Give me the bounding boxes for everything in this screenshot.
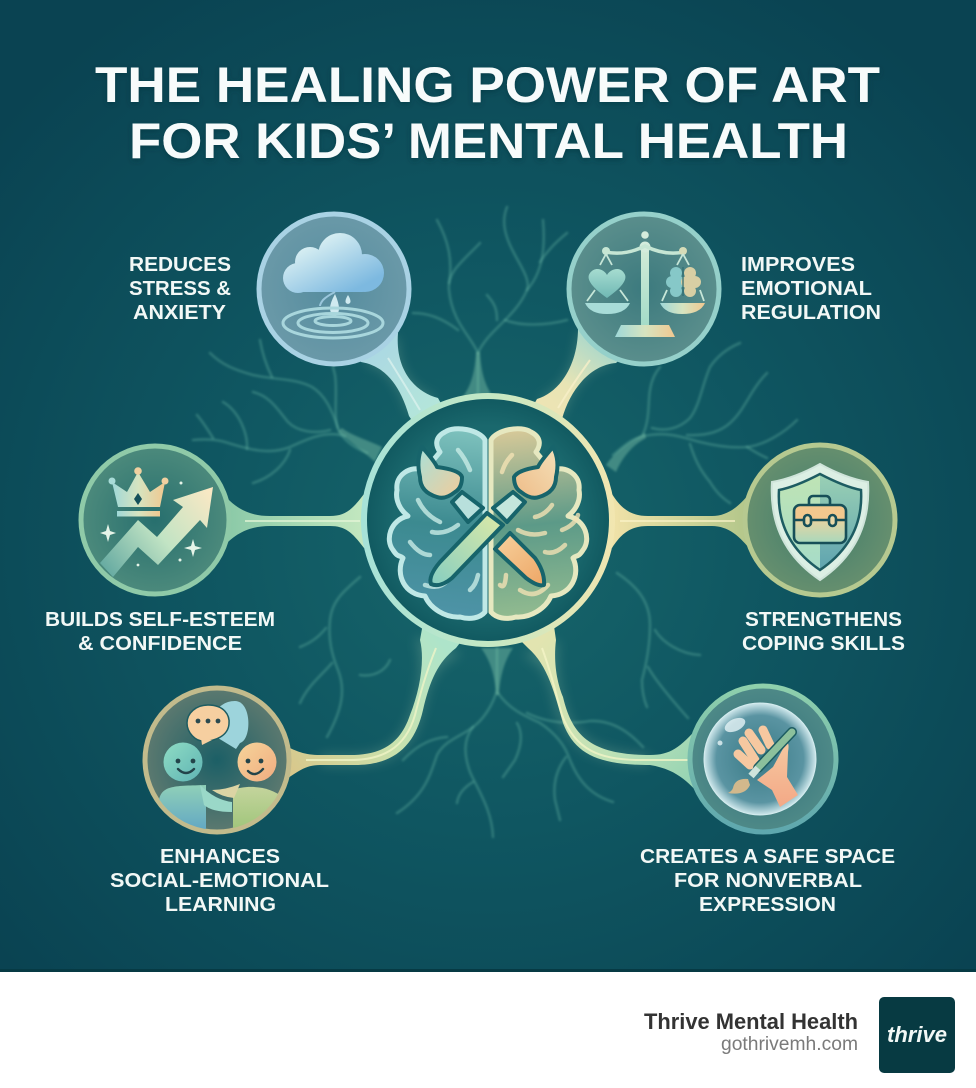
title: THE HEALING POWER OF ART	[95, 57, 880, 113]
label: strengthens coping skills: STRENGTHENS	[745, 608, 902, 631]
connector: safe space to centre	[510, 612, 705, 800]
central hub: brain and crossed paintbrushes	[364, 396, 612, 644]
label: strengthens coping skills: COPING SKILLS	[742, 632, 905, 655]
icon: briefcase	[794, 496, 846, 543]
panel: reduces stress and anxiety	[259, 214, 409, 364]
connector: stress to centre	[352, 325, 450, 440]
icon: two smiling friends	[159, 742, 278, 829]
icon: cloud with ripples	[283, 233, 384, 338]
connector glow	[320, 330, 650, 765]
connector: coping to centre	[596, 490, 752, 552]
label: reduces stress and anxiety: STRESS &	[129, 277, 231, 300]
logo	[879, 997, 955, 1073]
panel: strengthens coping skills	[745, 445, 895, 595]
label: builds self-esteem and confidence: & CONFIDENCE	[78, 632, 242, 655]
central ring	[364, 396, 612, 644]
label: enhances social-emotional learning: ENHANCES	[160, 845, 280, 868]
brand name: Thrive Mental Health	[644, 1009, 858, 1034]
label: enhances social-emotional learning: LEARNING	[165, 893, 276, 916]
icon: glass bubble	[704, 703, 816, 815]
label: reduces stress and anxiety: ANXIETY	[133, 301, 226, 324]
panel: builds self-esteem and confidence	[81, 446, 229, 594]
connector: regulation to centre	[525, 320, 630, 440]
label: builds self-esteem and confidence	[45, 608, 275, 655]
label: improves emotional regulation	[741, 253, 881, 324]
label: improves emotional regulation: EMOTIONAL	[741, 277, 872, 300]
icon: brain	[389, 429, 587, 618]
icon: shield with briefcase	[772, 464, 868, 580]
icon: left paintbrush	[418, 447, 544, 585]
label: builds self-esteem and confidence: BUILDS SELF-ESTEEM	[45, 608, 275, 631]
icon: rising arrow	[100, 487, 213, 577]
connector: confidence to centre	[220, 490, 380, 550]
label: improves emotional regulation: IMPROVES	[741, 253, 855, 276]
footer band	[0, 969, 976, 1088]
panel: enhances social-emotional learning	[145, 688, 290, 834]
label: reduces stress and anxiety: REDUCES	[129, 253, 231, 276]
label: enhances social-emotional learning: SOCIAL-EMOTIONAL	[110, 869, 329, 892]
connector: social-emotional to centre	[278, 612, 470, 785]
panel: improves emotional regulation	[569, 214, 719, 364]
icon: crown	[108, 467, 168, 516]
label: reduces stress and anxiety	[129, 253, 231, 324]
brand url: gothrivemh.com	[721, 1034, 858, 1055]
label: creates a safe space for nonverbal expression: CREATES A SAFE SPACE	[640, 845, 895, 868]
icon: right paintbrush	[430, 447, 557, 585]
label: creates a safe space for nonverbal expression	[640, 845, 895, 916]
label: improves emotional regulation: REGULATION	[741, 301, 881, 324]
label: creates a safe space for nonverbal expression: EXPRESSION	[699, 893, 836, 916]
logo: thrive	[887, 1022, 947, 1047]
label: enhances social-emotional learning	[110, 845, 329, 916]
icon: hand holding paintbrush	[718, 715, 798, 807]
title: FOR KIDS’ MENTAL HEALTH	[129, 113, 848, 169]
label: creates a safe space for nonverbal expression: FOR NONVERBAL	[674, 869, 862, 892]
icon: balance scale with heart and brain	[585, 231, 705, 337]
label: strengthens coping skills	[742, 608, 905, 655]
panel: creates a safe space for nonverbal expression	[690, 686, 836, 832]
icon: speech bubbles	[187, 701, 248, 749]
title	[95, 57, 880, 169]
background neural branches	[193, 207, 797, 837]
icon: sparkles	[100, 482, 202, 566]
